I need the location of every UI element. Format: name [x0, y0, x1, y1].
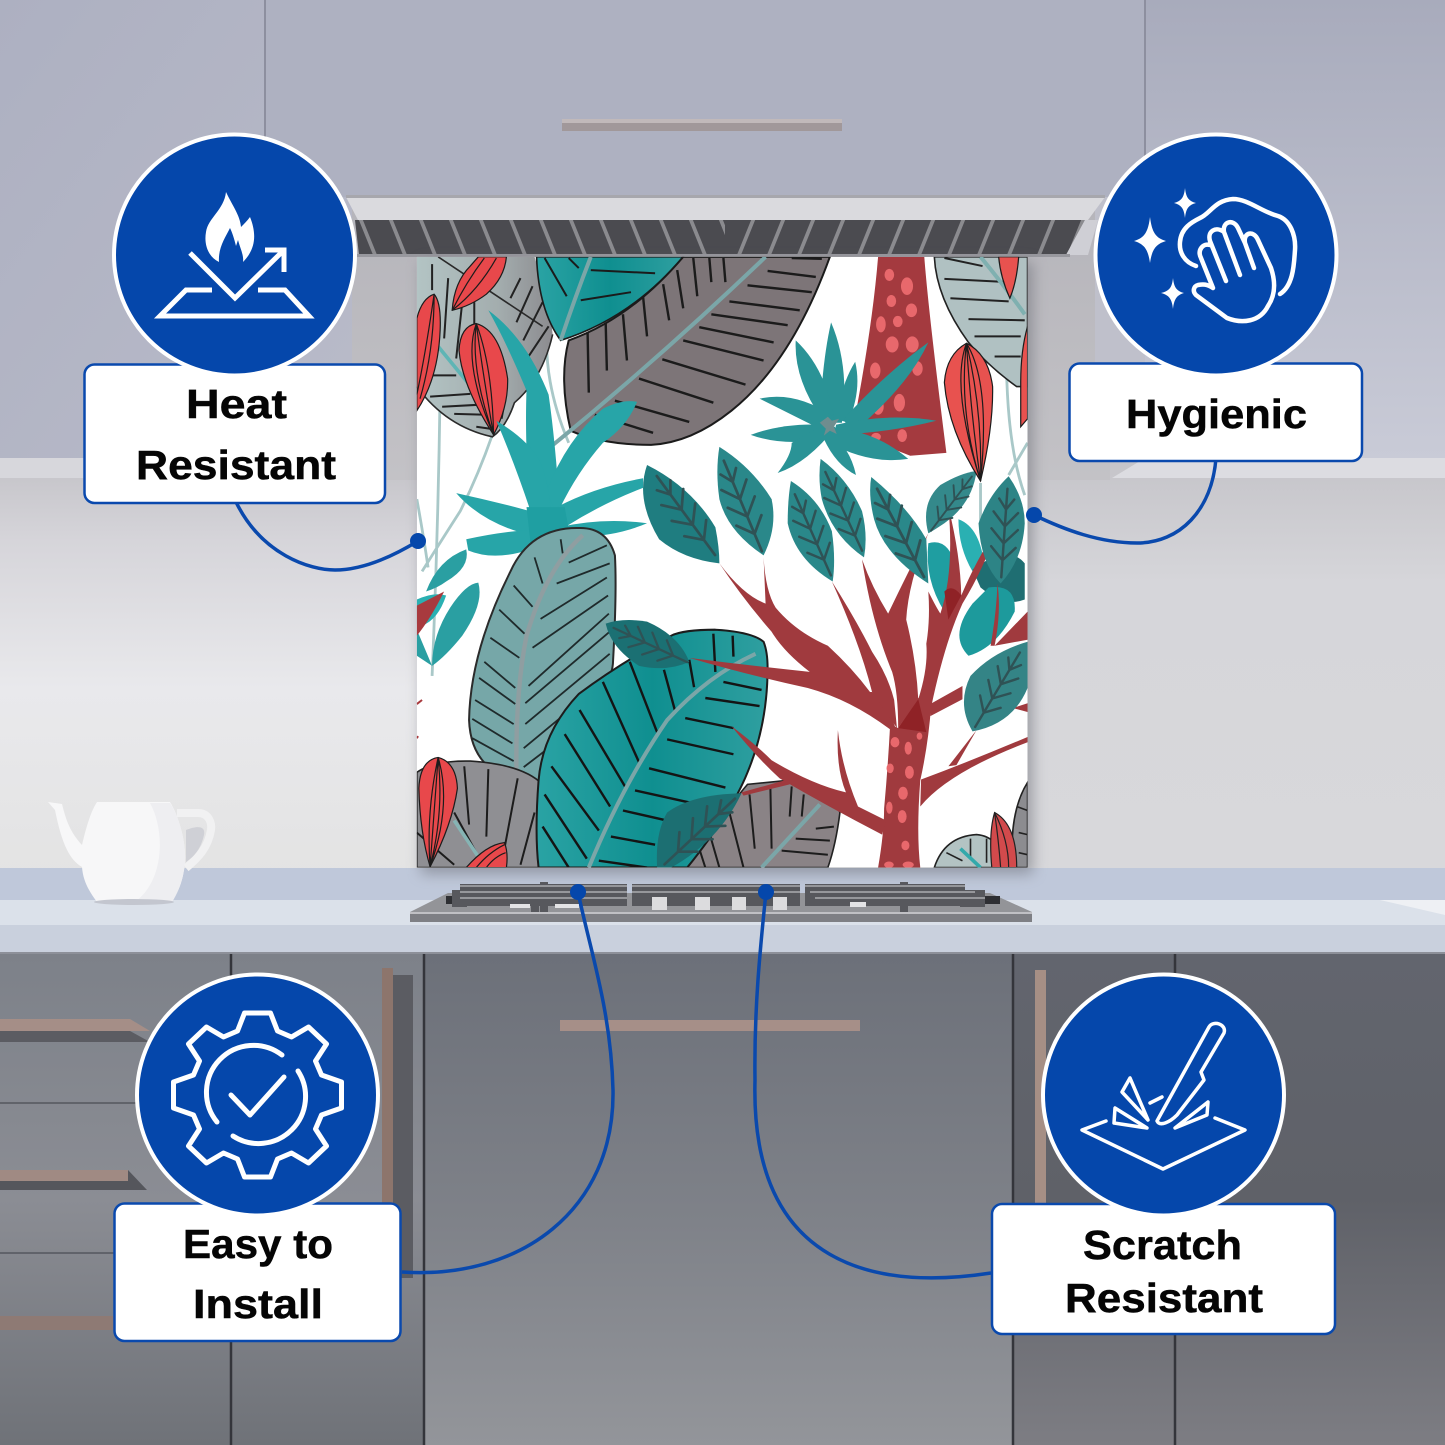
red tree trunk top	[852, 257, 946, 456]
label box: easy to install	[114, 1204, 400, 1341]
label text: scratch resistant: Resistant	[1065, 1275, 1263, 1321]
callout: hygienic	[1070, 134, 1362, 461]
leaf: grey bottom-right	[687, 780, 840, 868]
hob	[410, 882, 1032, 922]
panel shadow	[421, 262, 1033, 874]
icon: knife scratching surface	[1082, 1023, 1245, 1169]
leaf: top teal	[537, 257, 683, 340]
bright teal blobs	[928, 519, 1025, 656]
splashback panel: tropical leaves	[417, 257, 1031, 875]
red pods: bottom-left	[419, 757, 507, 868]
label text: heat resistant: Heat	[186, 381, 287, 427]
red pods: top-left	[417, 257, 508, 435]
range hood	[346, 195, 1105, 257]
small dark leaves	[606, 617, 745, 875]
icon: gear with check	[174, 1013, 342, 1177]
leaf: top-left grey	[417, 257, 553, 437]
leaf: pale teal tall	[469, 528, 616, 788]
connector: heat resistant	[236, 502, 426, 570]
badge: hygienic	[1096, 134, 1336, 376]
icon: hand wiping with sparkles	[1134, 188, 1295, 321]
label text: heat resistant: Resistant	[136, 442, 336, 488]
tree: red branches	[689, 507, 1028, 868]
label box: heat resistant	[84, 364, 385, 503]
small teal left leaves	[417, 549, 480, 738]
thin branches	[416, 352, 1028, 676]
label text: hygienic: Hygienic	[1126, 391, 1307, 437]
worktop	[0, 868, 1445, 954]
teapot	[48, 802, 211, 905]
teal star flower	[751, 322, 936, 475]
callout: easy to install	[114, 974, 400, 1341]
label box: scratch resistant	[992, 1204, 1335, 1334]
red pods: right	[944, 257, 1028, 481]
leaf: top-right pale	[934, 257, 1028, 387]
callout: heat resistant	[84, 134, 385, 503]
tree leaves	[643, 447, 1031, 734]
badge: scratch resistant	[1043, 974, 1284, 1216]
badge: easy to install	[137, 974, 378, 1216]
tree trunk dots	[884, 733, 922, 868]
connector: hygienic	[1026, 458, 1216, 543]
base cabinets	[0, 954, 1445, 1445]
callout: scratch resistant	[992, 974, 1335, 1334]
icon: flame over surface	[160, 192, 309, 316]
corner leaves: bottom-right	[934, 782, 1028, 868]
label text: easy to install: Install	[193, 1281, 323, 1327]
teal plant burst	[456, 310, 647, 556]
connector: scratch resistant	[755, 884, 991, 1278]
leaf: large top grey	[551, 257, 830, 447]
leaf: big teal	[537, 630, 768, 868]
label text: scratch resistant: Scratch	[1083, 1222, 1242, 1268]
badge: heat resistant	[114, 134, 355, 376]
upper cabinets	[0, 0, 1445, 478]
label box: hygienic	[1070, 364, 1362, 461]
leaf: grey bottom-left	[417, 761, 543, 868]
connector: easy to install	[402, 884, 613, 1273]
label text: easy to install: Easy to	[183, 1221, 333, 1267]
